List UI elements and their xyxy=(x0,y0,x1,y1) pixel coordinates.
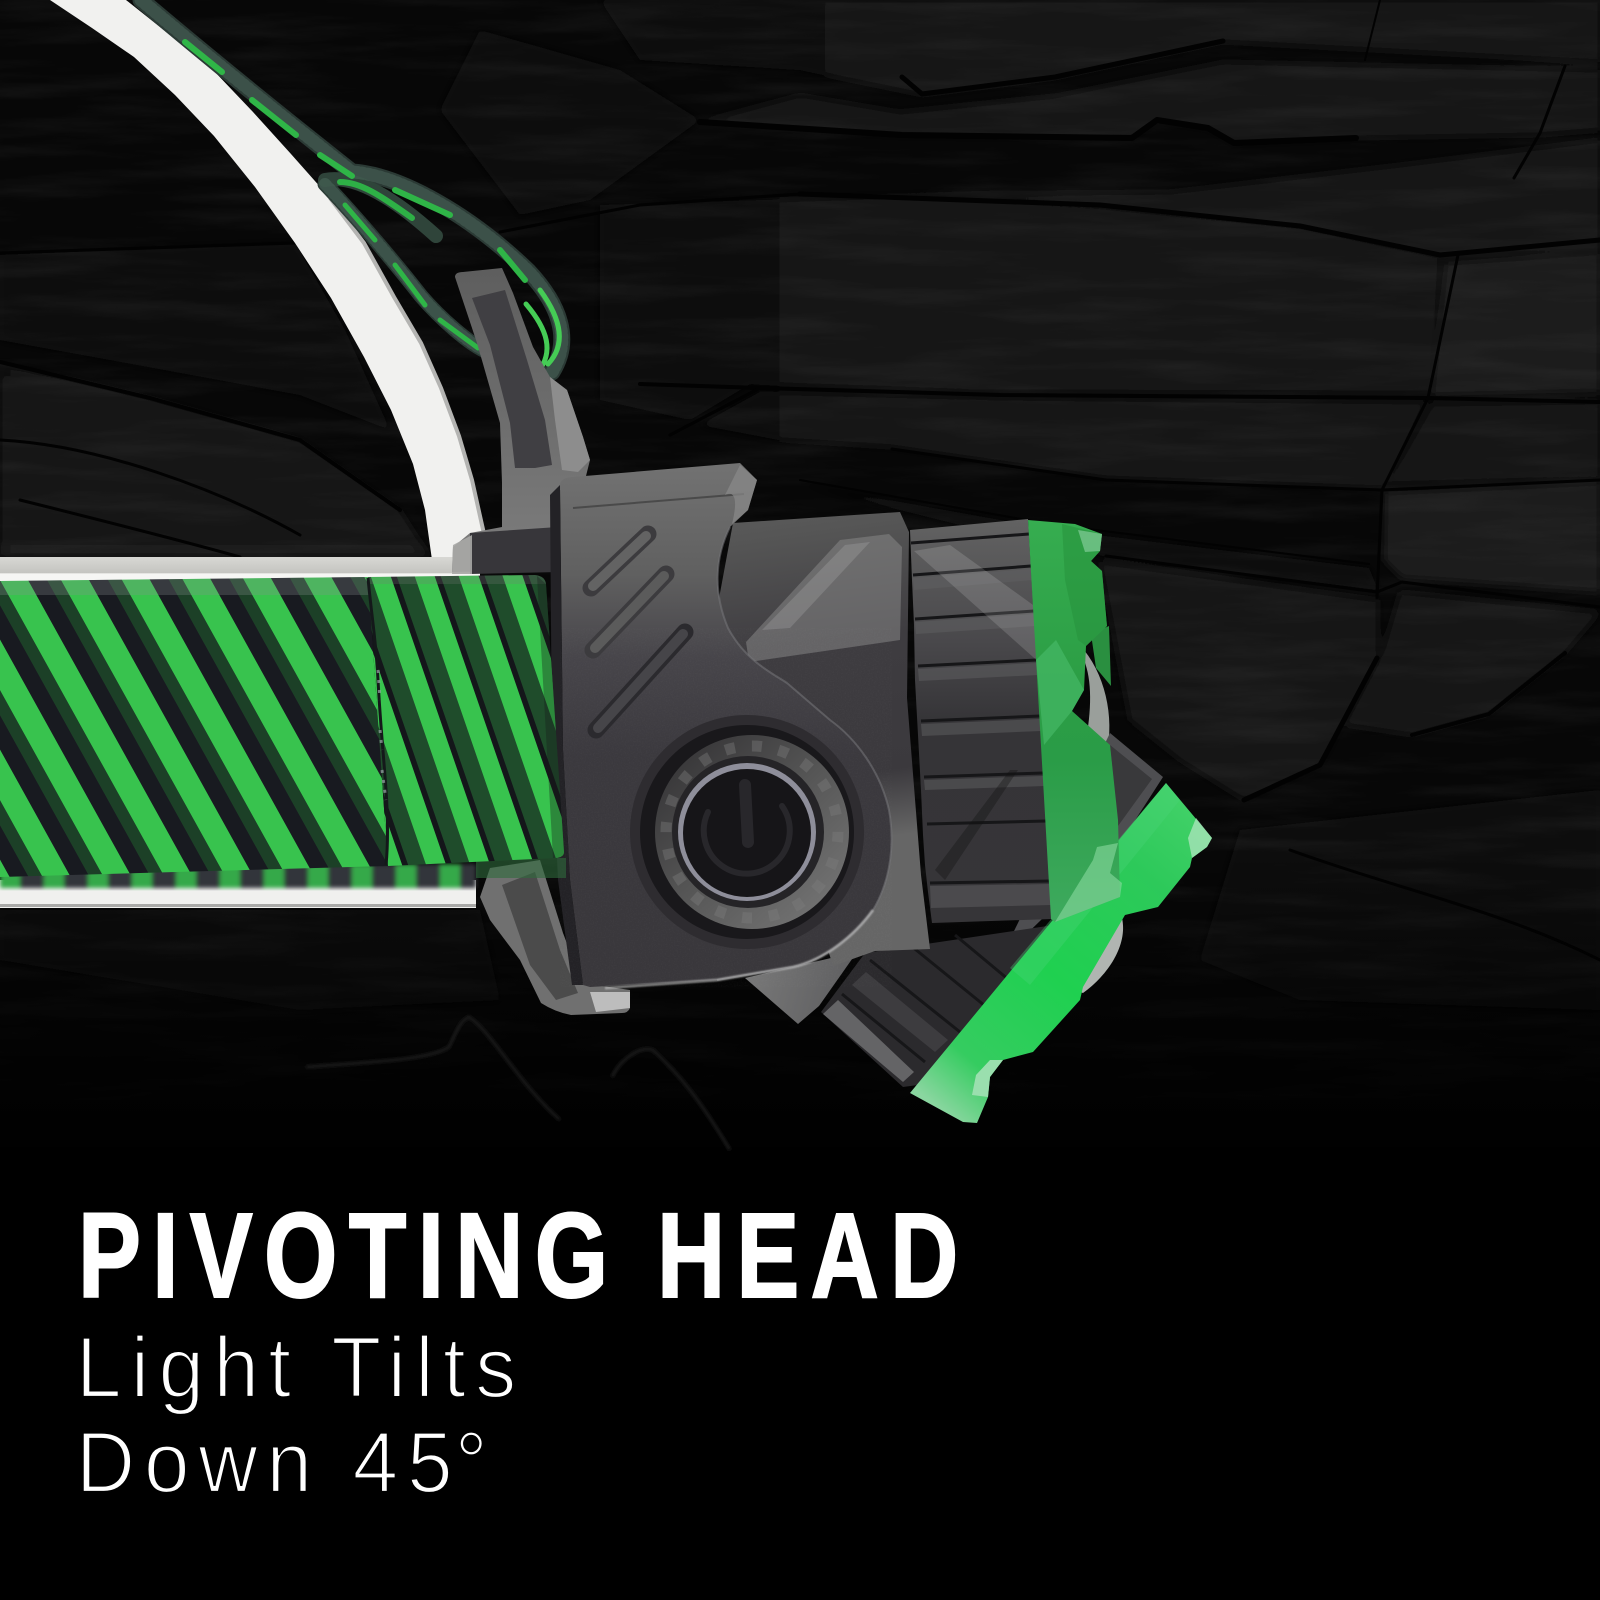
lower tilted head: knurled ring xyxy=(821,925,1054,1087)
power button with grip ring xyxy=(630,715,864,949)
headband strap: green and black diagonal stripes xyxy=(0,570,580,888)
housing: bottom clip xyxy=(480,860,630,1015)
subtitle: Light Tilts Down 45°: Down 45° xyxy=(76,1414,497,1510)
lower tilted head: translucent neck xyxy=(745,733,1163,1024)
strap hook: translucent clip xyxy=(452,268,590,574)
title: PIVOTING HEAD: PIVOTING HEAD xyxy=(78,1188,970,1323)
upright head: knurled ring xyxy=(910,519,1052,923)
housing: main body with pivot lobe xyxy=(550,463,892,988)
grooves xyxy=(591,534,685,730)
subtitle: Light Tilts Down 45° xyxy=(76,1319,526,1510)
housing: translucent grey neck xyxy=(715,512,930,966)
subtitle: Light Tilts Down 45°: Light Tilts xyxy=(76,1319,526,1415)
elastic cord with knot xyxy=(141,0,562,372)
faint cord reflection xyxy=(306,1017,730,1150)
lens of upright head xyxy=(1084,650,1109,760)
upright head: green bezel xyxy=(1028,520,1122,922)
white headband: curved top strap xyxy=(50,0,490,560)
body grain xyxy=(560,628,892,987)
icon: power symbol xyxy=(704,785,790,874)
white headband: horizontal lower strap edges xyxy=(0,557,480,908)
strap seam xyxy=(368,578,388,865)
lower tilted head: green bezel xyxy=(910,783,1212,1123)
